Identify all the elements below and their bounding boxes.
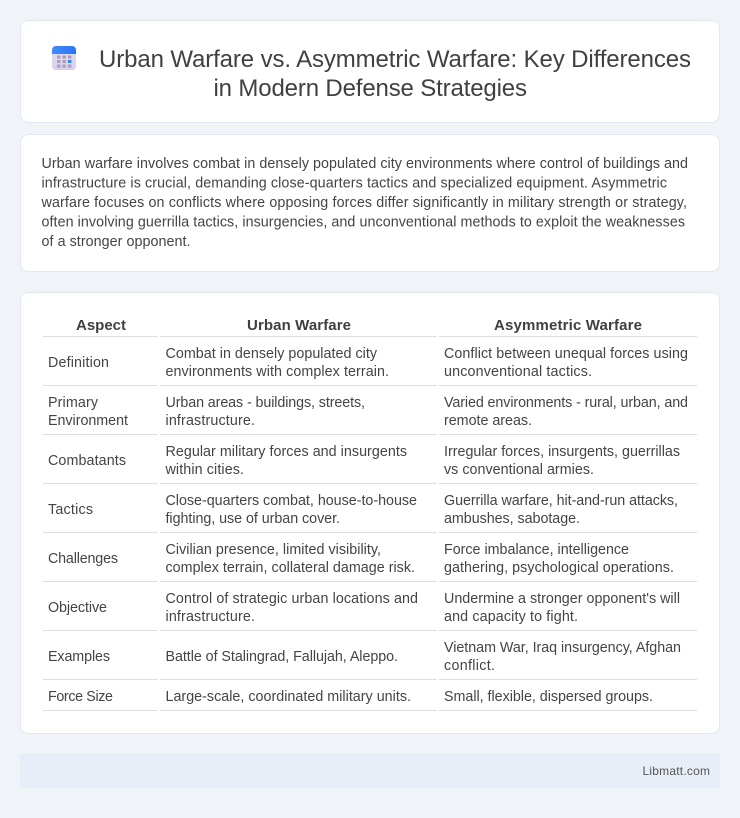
row: primary environment: Varied environments - rural, urban, and (444, 395, 688, 411)
row: tactics: Tactics (48, 502, 93, 518)
row: definition: unconventional tactics. (444, 364, 592, 380)
row: challenges (43, 542, 697, 582)
row: objective: Objective (48, 600, 107, 616)
row: examples (43, 640, 697, 680)
row: examples: Vietnam War, Iraq insurgency, Afghan (444, 640, 681, 656)
text block: introduction: of a stronger opponent. (42, 234, 190, 250)
row: challenges: gathering, psychological operations. (444, 560, 674, 576)
table header row: Aspect (76, 317, 126, 334)
text block: introduction: often involving guerrilla tactics, insurgencies, and unconventional methods to exploit the weaknesses (42, 214, 685, 230)
row: tactics: Close-quarters combat, house-to-house (166, 493, 417, 509)
row: tactics (43, 493, 697, 533)
panel: introduction (20, 134, 720, 272)
row: objective: and capacity to fight. (444, 609, 578, 625)
row: primary environment: Urban areas - buildings, streets, (166, 395, 365, 411)
row: tactics: Guerrilla warfare, hit-and-run attacks, (444, 493, 678, 509)
text block: introduction: warfare focuses on conflicts where opposing forces differ significantly in military strength or strategy, (40, 195, 687, 211)
row: combatants: Regular military forces and insurgents (166, 444, 407, 460)
row: tactics: ambushes, sabotage. (444, 511, 580, 527)
row: definition: environments with complex terrain. (166, 364, 389, 380)
table header row (43, 317, 697, 337)
row: examples: Battle of Stalingrad, Fallujah, Aleppo. (166, 649, 398, 665)
row: combatants: Irregular forces, insurgents, guerrillas (444, 444, 680, 460)
row: examples: Examples (48, 649, 110, 665)
row: primary environment: infrastructure. (166, 413, 255, 429)
row: definition: Combat in densely populated city (166, 346, 378, 362)
row: objective (43, 591, 697, 631)
icon: calendar (52, 46, 76, 70)
panel: comparison table (20, 292, 720, 734)
row: challenges: Civilian presence, limited visibility, (166, 542, 381, 558)
footer (20, 754, 720, 788)
text block: introduction: Urban warfare involves combat in densely populated city environments where control of buildings and (42, 156, 688, 172)
text block: introduction: infrastructure is crucial, demanding close-quarters tactics and specialized equipment. Asymmetric (42, 176, 667, 192)
table header row: Asymmetric Warfare (494, 317, 642, 334)
row: objective: Undermine a stronger opponent's will (444, 591, 680, 607)
row: primary environment: Environment (48, 413, 128, 429)
title: in Modern Defense Strategies (214, 75, 527, 102)
title: Urban Warfare vs. Asymmetric Warfare: Key Differences (99, 46, 691, 73)
row: primary environment: Primary (48, 395, 99, 411)
row: challenges: Force imbalance, intelligence (444, 542, 629, 558)
row: objective: infrastructure. (166, 609, 255, 625)
row: force size: Large-scale, coordinated military units. (166, 689, 411, 705)
footer: Libmatt.com (642, 764, 710, 778)
row: combatants: within cities. (164, 462, 244, 478)
row: force size (43, 689, 697, 711)
title (99, 46, 691, 102)
row: force size: Small, flexible, dispersed groups. (444, 689, 653, 705)
row: combatants: Combatants (48, 453, 126, 469)
row: definition: Definition (48, 355, 109, 371)
row: objective: Control of strategic urban locations and (166, 591, 418, 607)
row: primary environment: remote areas. (444, 413, 532, 429)
row: tactics: fighting, use of urban cover. (166, 511, 340, 527)
table header row: Urban Warfare (247, 317, 351, 334)
row: definition: Conflict between unequal forces using (444, 346, 688, 362)
row: combatants (43, 444, 697, 484)
row: examples: conflict. (444, 658, 495, 674)
row: force size: Force Size (48, 689, 113, 705)
row: primary environment (43, 395, 697, 435)
text block: introduction (40, 156, 688, 250)
row: challenges: Challenges (48, 551, 118, 567)
row: challenges: complex terrain, collateral damage risk. (166, 560, 415, 576)
row: definition (43, 346, 697, 386)
row: combatants: vs conventional armies. (444, 462, 594, 478)
panel: header (20, 20, 720, 122)
